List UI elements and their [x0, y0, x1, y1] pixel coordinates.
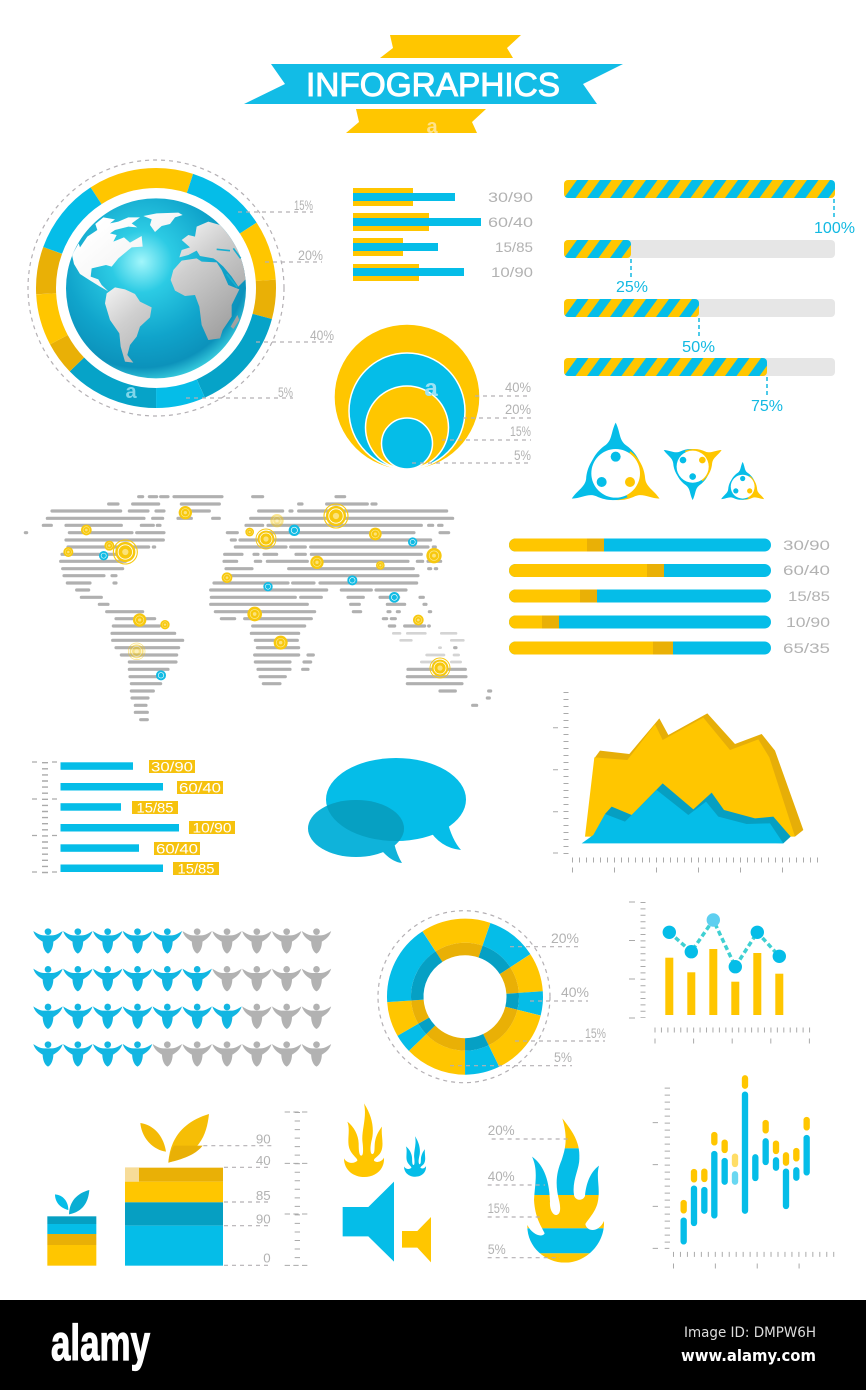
progress 25%: 25%: [616, 279, 648, 296]
inner segments: [397, 929, 533, 1064]
flame labels: 15%: [488, 1200, 510, 1216]
people pictogram: [33, 928, 331, 1067]
map markers yellow: [63, 504, 450, 678]
outer segments: [372, 903, 558, 1090]
icon: leaves: [140, 1114, 209, 1163]
nested circles chart: a: [424, 375, 438, 402]
value tags: 15/85: [178, 860, 215, 876]
value tags: 15/85: [136, 800, 174, 816]
bar row 10/90: 10/90: [786, 614, 830, 630]
icon: large tri-blade: [558, 423, 673, 522]
values: [256, 1132, 271, 1266]
row 2: 6 of 10: [33, 966, 331, 991]
double bar chart: top: 60/40: [488, 214, 533, 230]
leader: 5%: 5%: [278, 384, 293, 400]
bar row 10/90: [509, 614, 830, 630]
alamy logo: alamy: [51, 1315, 150, 1371]
globe donut chart: a: [125, 381, 137, 403]
dotted world map: [25, 497, 491, 720]
icon: yellow speaker: [402, 1217, 431, 1262]
title banner: a: [426, 116, 438, 138]
leader: 40%: [256, 327, 334, 343]
map markers blue: [99, 525, 417, 680]
bar row 65/35: 65/35: [783, 640, 830, 656]
leader: 15%: [238, 197, 313, 213]
bar row 30/90: 30/90: [783, 537, 830, 553]
donut leaders and labels: 15%: [585, 1025, 606, 1041]
large plant box chart: [125, 1112, 311, 1266]
bar row 60/40: 60/40: [783, 562, 830, 578]
leader: 5%: [186, 384, 293, 400]
dashed outline ring: [378, 911, 550, 1083]
yellow caps: [684, 1078, 807, 1210]
donut leaders and labels: 5%: [554, 1049, 572, 1065]
bar and line combo chart: [629, 902, 811, 1041]
map land lines: [25, 497, 491, 720]
double bar chart: top: 30/90: [488, 189, 533, 205]
value tags: 30/90: [151, 758, 193, 774]
leader: 20%: 20%: [298, 247, 323, 263]
map faded lines: [393, 633, 463, 662]
icon: globe: [66, 198, 248, 378]
value tags: [132, 758, 235, 876]
donut leaders and labels: [450, 930, 606, 1066]
icon: small tri-blade: [715, 462, 771, 510]
dashed outline ring: [28, 160, 284, 416]
bar row 15/85: [509, 588, 830, 604]
row 4: 4 of 10: [33, 1041, 331, 1067]
stacked horizontal bars: [509, 537, 830, 656]
striped progress bars: [564, 180, 855, 415]
bars: [60, 762, 179, 872]
leader: 15%: 15%: [294, 197, 313, 213]
values: 40: [256, 1153, 271, 1168]
icon: blue flame: [404, 1136, 426, 1177]
blue ranges: [684, 1095, 807, 1241]
range chart axes: [653, 1088, 835, 1266]
area shapes: [582, 713, 803, 843]
donut leaders and labels: 40%: [561, 984, 589, 1000]
donut leaders and labels: 20%: [551, 930, 579, 946]
combo axes: [629, 902, 811, 1041]
value tags: 60/40: [156, 840, 198, 856]
bar row 65/35: [509, 640, 830, 656]
double bar chart: top: [353, 188, 533, 281]
nested circles chart: 5%: [514, 447, 531, 463]
values: 90: [256, 1132, 271, 1147]
progress 100%: 100%: [814, 220, 855, 237]
yellow bars: [665, 949, 783, 1015]
small plant box: [47, 1190, 96, 1266]
progress 75%: [564, 358, 835, 415]
flame labels: 20%: [488, 1122, 515, 1138]
icon: speech bubbles: [308, 758, 466, 863]
nested circles chart: 40%: [505, 379, 531, 395]
value tags: 60/40: [179, 780, 221, 796]
bar row 60/40: [509, 562, 830, 578]
bar row 15/85: 15/85: [788, 588, 830, 604]
stacked box: [125, 1168, 223, 1266]
nested circles chart: 15%: [510, 423, 531, 439]
website: www.alamy.com: [681, 1346, 816, 1365]
bar row 30/90: [509, 537, 830, 553]
tri-blade icons: [558, 423, 771, 522]
striped flame chart: [488, 1113, 610, 1267]
icon: yellow flame: [344, 1103, 384, 1177]
flame labels: 5%: [488, 1241, 506, 1257]
row 3: 7 of 10: [33, 1004, 331, 1029]
flame labels: 40%: [488, 1168, 515, 1184]
values: 90: [256, 1212, 271, 1227]
progress 75%: 75%: [751, 398, 783, 415]
footer bar: [0, 1300, 866, 1390]
area chart: [553, 692, 818, 870]
tick axis: [32, 762, 57, 874]
area chart axes: [553, 692, 818, 870]
icon: inverted tri-blade: [655, 435, 730, 500]
segmented donut chart: [372, 903, 606, 1090]
leaders: [203, 1146, 272, 1265]
nested circles chart: 20%: [505, 401, 531, 417]
title banner: [244, 35, 623, 138]
dotted trend line: [663, 913, 786, 973]
double bar chart: top: 15/85: [495, 239, 533, 255]
segmented ring: [0, 132, 312, 444]
globe donut chart: [27, 159, 334, 417]
image id: Image ID: DMPW6H: [684, 1325, 816, 1341]
value tags: 10/90: [192, 820, 232, 836]
leader: 40%: 40%: [310, 327, 334, 343]
nested circles chart: [335, 325, 531, 469]
values: 85: [256, 1188, 271, 1203]
range bar chart: [653, 1078, 835, 1266]
icons: flames and speakers: [343, 1103, 431, 1262]
double bar chart: top: 10/90: [491, 264, 533, 280]
values: 0: [263, 1251, 271, 1266]
flame labels: [488, 1122, 515, 1257]
row 1: 5 of 10: [33, 928, 331, 954]
leader: 20%: [265, 247, 323, 263]
flame: [488, 1113, 610, 1267]
progress 50%: [564, 299, 835, 356]
progress 25%: [564, 240, 835, 296]
horizontal bars with tags: [32, 758, 235, 876]
title banner: INFOGRAPHICS: [306, 66, 560, 103]
icon: blue speaker: [343, 1182, 394, 1262]
progress 100%: [564, 180, 855, 237]
scale axis: [285, 1112, 311, 1266]
progress 50%: 50%: [682, 339, 715, 356]
